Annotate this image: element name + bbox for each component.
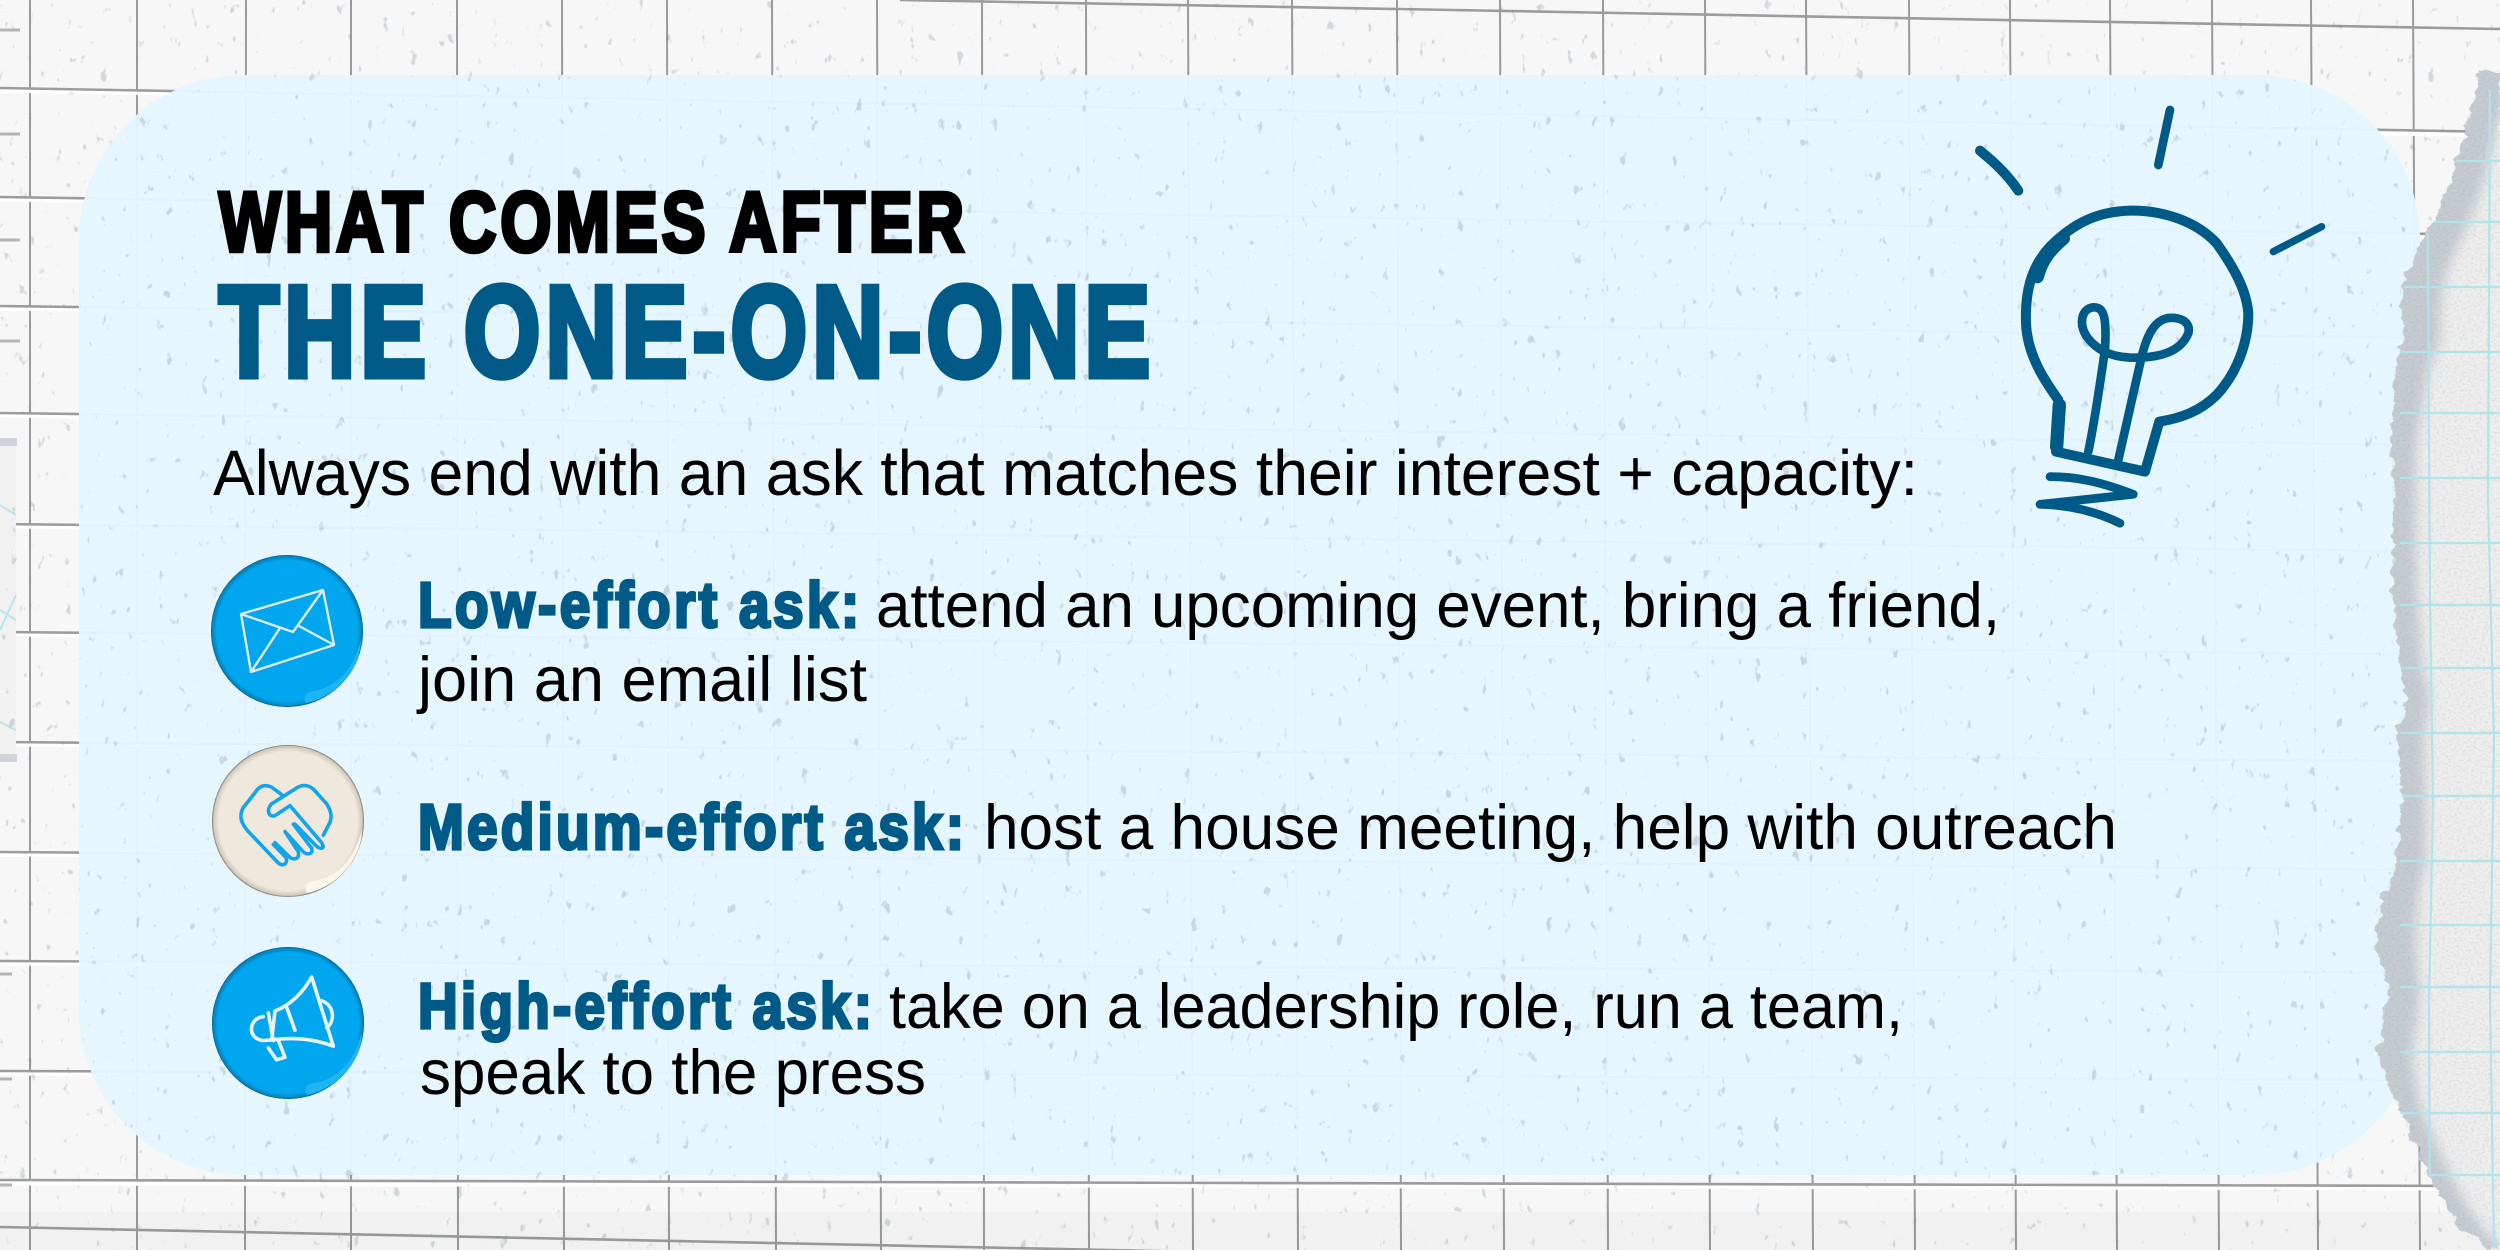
low-effort text (416, 569, 2000, 715)
medium-effort text (418, 791, 2117, 863)
icon: megaphone badge (212, 947, 364, 1099)
torn paper strip at right (2370, 60, 2500, 1250)
title: THE ONE-ON-ONE (219, 260, 1150, 404)
left edge paper scrap (0, 438, 17, 762)
medium-effort text: host a house meeting, help with outreach (984, 793, 2117, 863)
high-effort text (418, 970, 1903, 1108)
row: medium-effort ask (212, 745, 2117, 897)
high-effort text: High-effort ask: (418, 970, 872, 1042)
icon: handshake badge (212, 745, 364, 897)
low-effort text: Low-effort ask: (418, 569, 859, 641)
icon: light bulb (1980, 110, 2322, 523)
low-effort text: attend an upcoming event, bring a friend, (876, 571, 2000, 641)
bottom torn strip shading (0, 1212, 2500, 1250)
row: low-effort ask (211, 555, 2000, 715)
row: high-effort ask (212, 947, 1903, 1108)
high-effort text: speak to the press (420, 1038, 926, 1108)
title (219, 175, 1150, 404)
intro text: Always end with an ask that matches their interest + capacity: (213, 437, 1918, 509)
high-effort text: take on a leadership role, run a team, (889, 972, 1903, 1042)
medium-effort text: Medium-effort ask: (418, 791, 964, 863)
title: WHAT COMES AFTER (219, 175, 964, 269)
low-effort text: join an email list (416, 645, 867, 715)
icon: envelope badge (211, 555, 363, 707)
